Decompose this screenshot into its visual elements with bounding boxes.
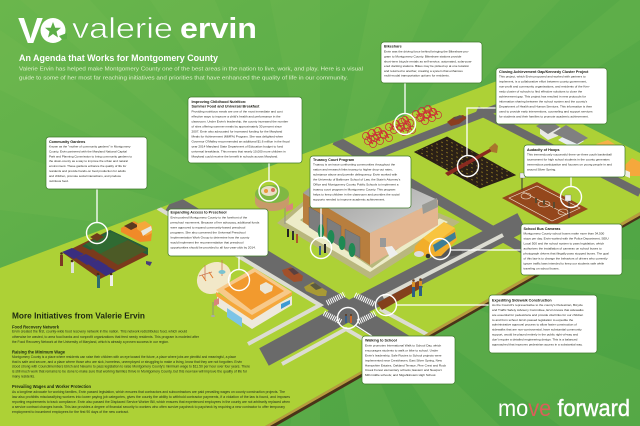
callout: closing achievement gap: implement, is a collaborative effort between county government,	[499, 80, 587, 84]
callout: walking to school	[362, 336, 455, 384]
group of students	[287, 229, 326, 255]
callout: expanding access to preschool: were approved to expand community-based preschool	[170, 225, 246, 229]
callout: expediting sidewalk construction: and Traffic Safety Advisory Committee, Ervin knows that sidewalks	[492, 308, 584, 312]
callout: truancy court program: supports needed to improve academic achievement.	[313, 198, 385, 202]
raising the minimum wage: Montgomery County is a place where residents can raise their children with an eye toward the future, a place where jobs are plentiful and meaningful, a place	[12, 355, 236, 359]
callout: community gardens: residents and provide hands-on food production for adults	[49, 169, 126, 173]
crosswalks	[324, 294, 376, 322]
crowd at graduation	[415, 137, 515, 188]
callout: bikeshare: gram to Montgomery County. Bikeshare stations provide	[384, 54, 462, 58]
callout: expediting sidewalk construction: administrative approval process to allow faster construction of	[492, 323, 577, 327]
callout: bikeshare: Bikeshare	[384, 45, 402, 49]
flag at school	[285, 203, 293, 224]
callout: school bus cameras: of this law is to change the behaviors of drivers who currently	[524, 256, 608, 260]
food recovery network: Food Recovery Network	[12, 324, 60, 330]
callout: improving childhood nutrition: Providing nutritious meals are one of the most immediate and cost	[192, 110, 283, 114]
intro text	[19, 66, 363, 82]
callout: walking to school: encourages students to walk or bike to school. Under	[365, 349, 438, 353]
raising the minimum wage: that is safe and secure, and a place where those who are sick, homeless, unemployed or struggling to make a living, know that they are not forgotten. Ervin	[12, 360, 242, 364]
callout: expediting sidewalk construction: support, would be placed entirely in the public right-of-way and	[492, 333, 578, 337]
callout: truancy court program: substance abuse and juvenile delinquency. Ervin worked with	[313, 173, 398, 177]
callout: expediting sidewalk construction: don't require a detailed engineering design. This is a balanced	[492, 337, 578, 341]
callout: audacity of hoops: Audacity of Hoops	[527, 148, 560, 152]
food recovery network: the Food Recovery Network at the University of Maryland, which is already a proven success in our region.	[12, 340, 169, 344]
callout: walking to school: Walking to School	[365, 338, 397, 342]
callout: closing achievement gap: for students and their families to promote academic achievement.	[499, 114, 589, 118]
callout: improving childhood nutrition: year 2014 Maryland State Department of Education budget to fund	[192, 144, 283, 148]
callout: community gardens: Park and Planning Commission to bring community gardens to	[49, 154, 132, 158]
playground	[191, 255, 237, 301]
callout: expediting sidewalk construction: to and from school. Ervin passed legislation to expedite the	[492, 318, 574, 322]
callout: expediting sidewalk construction: approached that improves pedestrian access in a substantial way.	[492, 342, 583, 346]
callout: expediting sidewalk construction: are essential for pedestrians and provide vital links for our children	[492, 313, 584, 317]
callout: closing achievement gap: Closing Achievement Gap/Kennedy Cluster Project	[499, 70, 589, 74]
callout: walking to school: implemented near Crestthaven, East Silver Spring, New	[365, 358, 443, 362]
callout: improving childhood nutrition: 2007. Ervin also advocated for increased funding for the Maryland	[192, 129, 283, 133]
callout: community gardens: County, Ervin partnered with the Maryland National Capital	[49, 149, 127, 153]
red car	[282, 267, 303, 282]
callout: truancy court program: nation and research links truancy to higher drop-out rates,	[313, 168, 393, 172]
callout: community gardens: environment. These gardens enhance the quality of life for	[49, 164, 126, 168]
food recovery network: otherwise be wasted, to area food banks and nonprofit organizations that feed needy residents. This program is modeled after	[12, 335, 200, 339]
callout: walking to school: Ervin promotes International Walk to School Day, which	[365, 344, 441, 348]
callout: improving childhood nutrition: Improving Childhood Nutrition:	[192, 100, 246, 104]
callout: closing achievement gap: non-profit and community organizations, and residents of the Ken-	[499, 85, 590, 89]
callout: bikeshare: Ervin was the driving force behind bringing the Bikeshare pro-	[384, 50, 469, 54]
callout: improving childhood nutrition: Maryland could receive the benefit in schools across Maryland.	[192, 154, 278, 158]
raising the minimum wage: Raising the Minimum Wage	[12, 350, 66, 354]
pedestrians at the crossing	[345, 314, 352, 323]
prevailing wages and worker protection	[12, 384, 290, 414]
move forward slogan: move forward	[498, 395, 630, 421]
flag at preschool	[211, 298, 219, 317]
logo star e	[40, 18, 67, 43]
car on bikeshare road	[447, 115, 467, 126]
raising the minimum wage	[12, 350, 250, 379]
callout: walking to school: Hampshire Estates, Oakland Terrace, Pine Crest and Rock	[365, 363, 446, 367]
prevailing wages and worker protection: a service contract changes hands. This law provides a degree of financial security to workers who often survive paycheck to paycheck by requiring a new contractor to offer temporary	[12, 405, 285, 409]
callout: community gardens: nutritious food.	[49, 179, 69, 183]
callout: closing achievement gap: Department of Health and Human Services. This information is then	[499, 104, 592, 108]
preschool building	[216, 268, 292, 329]
callout: truancy court program: the University of Baltimore School of Law, the State's Attorney's	[313, 178, 401, 182]
school grounds	[277, 172, 460, 279]
callout: school bus cameras: Montgomery County school buses make more than 34,500	[524, 232, 604, 236]
callout: closing achievement gap: This project, which Ervin proposed and worked with partners to	[499, 75, 586, 79]
callout: audacity of hoops: This tremendously successful three-on-three youth basketball	[527, 152, 612, 156]
prevailing wages and worker protection: Prevailing Wages and Worker Protection	[12, 384, 91, 389]
callout: closing achievement gap: nedy cluster of schools to find effective solutions to close the	[499, 90, 583, 94]
houses	[536, 120, 640, 178]
callout: bikeshare: and returned to another, creating a system that enhances	[384, 69, 463, 73]
callout: school bus cameras: photograph drivers that illegally pass stopped buses. The goal	[524, 252, 609, 256]
callout: truancy court program: truancy court program in Montgomery County. This program	[313, 188, 396, 192]
callout: school bus cameras: ignore traffic laws intended to keep our students safe while	[524, 261, 604, 265]
prevailing wages and worker protection: employment to incumbent employees for the first 90 days of the new contract.	[12, 410, 129, 414]
callout: school bus cameras: authorizes the installation of cameras on school buses to	[524, 247, 602, 251]
raising the minimum wage: is still much work that remains to be done to make sure that working families thrive in Montgomery County, but this new law will improve the quality of life for	[12, 370, 248, 374]
callout: expediting sidewalk construction: As the Council's representative to the county's Pedestrian, Bicycle	[492, 303, 583, 307]
raising the minimum wage: stood strong with Councilmembers Elrich and Navarro to pass legislation to raise Montgomery County's minimum wage to $11.50 per hour over four years. There	[12, 365, 250, 369]
callout: walking to school: Ervin's leadership, Safe Routes to School projects were	[365, 354, 442, 358]
community garden	[60, 230, 152, 288]
logo letter V: V	[18, 10, 43, 51]
road network	[158, 108, 640, 372]
callout: expanding access to preschool: programs. She also convened the Universal Preschool	[170, 230, 246, 234]
callout: audacity of hoops	[524, 145, 625, 177]
callout: walking to school: Mill middle schools; and Sligo/Einstein High School.	[365, 373, 436, 377]
callout: community gardens: Known as the "mother of community gardens" in Montgomery	[49, 144, 131, 148]
callout: school bus cameras: traveling on school buses.	[524, 266, 560, 270]
callout: expanding access to preschool	[168, 209, 268, 256]
callout: expanding access to preschool: would implement the recommendation that preschool	[170, 240, 244, 244]
callout: truancy court program: Office and Montgomery County Public Schools to implement a	[313, 183, 399, 187]
callout: expediting sidewalk construction	[489, 295, 597, 353]
school building	[303, 158, 438, 265]
callout: improving childhood nutrition: Governor O'Malley recommended an additional $1.6 million in the fiscal	[192, 139, 290, 143]
callout: audacity of hoops: tournament for high school students in the county generates	[527, 157, 610, 161]
logo: VE mark and wordmark	[18, 10, 257, 51]
prevailing wages and worker protection: law also prohibits misclassifying workers into lower paying job categories, gives the county the ability to withhold contractor payments, if a violation of the law is found, and imposes	[12, 395, 290, 399]
olive car	[304, 282, 327, 296]
callout: school bus cameras: stops per day. Ervin worked with the Police Department, SEIU	[524, 237, 609, 241]
callout: closing achievement gap: used to provide early interventions, counseling and support services	[499, 109, 593, 113]
basketball court	[502, 173, 588, 226]
callout: community gardens	[46, 137, 147, 189]
callout: community gardens: Community Gardens	[49, 140, 85, 144]
leader lines	[97, 83, 571, 336]
intro text: guide to some of her most far reaching initiatives and priorities that have enhanced the quality of life in our community.	[19, 76, 348, 82]
school bus	[414, 222, 462, 258]
more initiatives heading: More Initiatives from Valerie Ervin	[12, 310, 145, 320]
callout: closing achievement gap: information sharing between the school system and the county's	[499, 99, 588, 103]
trees	[318, 224, 355, 257]
callout: expediting sidewalk construction: Expediting Sidewalk Construction	[492, 298, 552, 302]
callout: school bus cameras: School Bus Cameras	[524, 227, 560, 231]
callout: truancy court program: Truancy Court Program	[313, 158, 355, 162]
callout: audacity of hoops: tremendous participation and focuses on young people in and	[527, 162, 612, 166]
callout: truancy court program: helps to keep children in the classroom and provides the social	[313, 193, 400, 197]
callout: improving childhood nutrition: Summer Food and Universal Breakfast	[192, 105, 260, 109]
callout: bikeshare	[381, 42, 482, 83]
raising the minimum wage: many residents.	[12, 375, 35, 379]
callout: truancy court program: Truancy is an issue confronting communities throughout the	[313, 163, 395, 167]
callout: truancy court program	[310, 156, 411, 208]
callout: improving childhood nutrition: Meals for Achievement (MMFA) Program. She was delighted when	[192, 134, 283, 138]
callout: expanding access to preschool: opportunities should be provided to all four-year-olds by 2014.	[170, 245, 256, 249]
callout: bikeshare: ered docking stations. Bikes may be picked up at one location	[384, 64, 469, 68]
callout: school bus cameras: Local 500 and the school system to pass legislation, which	[524, 242, 604, 246]
callout: closing achievement gap: achievement gap. This project has resulted in new protocols for	[499, 94, 586, 98]
title: An Agenda that Works for Montgomery County	[19, 53, 218, 63]
callout: expanding access to preschool: preschool movement. Because of her advocacy, additional funds	[170, 220, 260, 224]
callout: audacity of hoops: around Silver Spring.	[527, 167, 556, 171]
wordmark valerie: valerie	[72, 13, 173, 45]
callout: closing achievement gap	[496, 68, 607, 124]
nutrition disc	[255, 185, 289, 211]
callout: improving childhood nutrition: classroom. Under Ervin's leadership, the county increased the number	[192, 120, 288, 124]
callout: bikeshare: short-term bicycle rentals as self-service, automated, solar-pow-	[384, 59, 472, 63]
bikes	[362, 105, 442, 148]
pickup truck	[121, 221, 152, 242]
callout: expanding access to preschool: Ervin pushed Montgomery County to the forefront of the	[170, 215, 247, 219]
prevailing wages and worker protection: As a longtime advocate for working families, Ervin passed legislation, which ensures that contractors and subcontractors are paid prevailing wages on county construction projects. The	[12, 390, 285, 394]
food recovery network: Ervin created the first, county-wide food recovery network in the nation. This network redistributes food, which would	[12, 330, 187, 334]
callout: bikeshare: multi-modal transportation options for residents.	[384, 74, 450, 78]
callout: improving childhood nutrition: of sites offering summer meals by approximately 30 percent since	[192, 125, 282, 129]
callout: community gardens: and children, promote social interactions, and produce	[49, 174, 121, 178]
callout: walking to school: Creek Forest elementary schools; Eastern and Newport	[365, 368, 442, 372]
prevailing wages and worker protection: reporting requirements to track compliance. Ervin also passed the Displaced Service Worker Bill, which ensures that experienced employees in the county are not arbitrarily replaced when	[12, 400, 290, 404]
marker rings	[86, 114, 582, 328]
food recovery network	[12, 324, 200, 344]
callout: expanding access to preschool: Expanding Access to Preschool	[170, 210, 227, 214]
intro text: Valerie Ervin has helped make Montgomery County one of the best areas in the nation to live, work, and play. Here is a visual	[19, 66, 363, 72]
callout: improving childhood nutrition	[188, 97, 302, 163]
sidewalk construction trench	[377, 278, 423, 310]
callout: improving childhood nutrition: effective ways to improve a child's health and performance in the	[192, 115, 281, 119]
wordmark ervin: ervin	[180, 13, 257, 45]
callout: school bus cameras	[521, 224, 622, 275]
callout: community gardens: the down-county as a way to improve the urban and natural	[49, 159, 128, 163]
callout: improving childhood nutrition: universal breakfasts. This means that nearly 10,000 more children in	[192, 149, 286, 153]
callout: expediting sidewalk construction: sidewalks that are non-controversial, have substantial community	[492, 328, 582, 332]
callout: expanding access to preschool: Implementation Work Group to determine how the county	[170, 235, 250, 239]
